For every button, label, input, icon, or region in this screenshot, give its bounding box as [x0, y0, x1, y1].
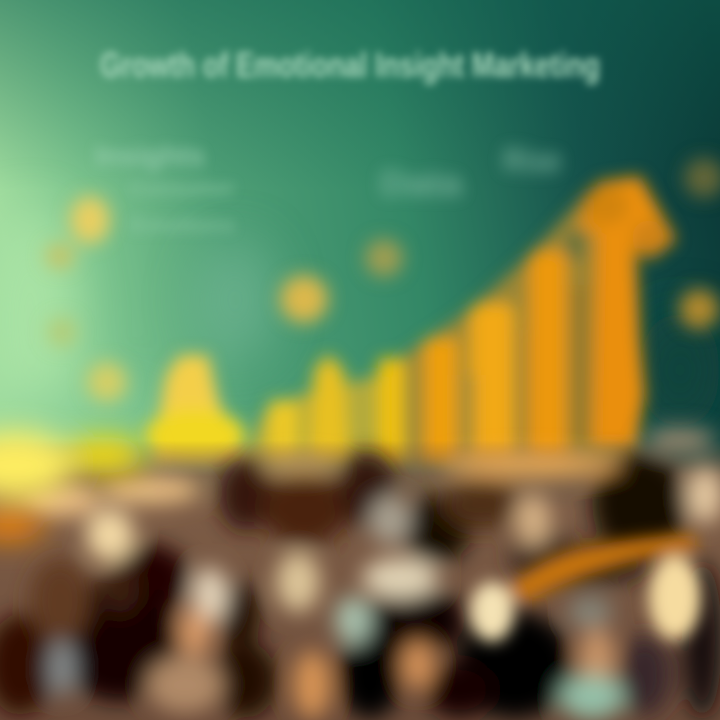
text block: right notes: Data	[380, 165, 463, 203]
background: darker band at top	[0, 0, 720, 190]
crowd: blurred ground and people shapes	[0, 428, 720, 719]
glow: yellow light at left	[0, 431, 145, 541]
text block: right notes: Rise	[503, 142, 561, 180]
text block: left notes: Consumer	[130, 178, 235, 200]
background glow	[0, 210, 720, 432]
dark figures	[0, 452, 720, 719]
coins: floating gold circles	[45, 158, 720, 402]
bar chart: rising yellow and orange bars with arrow	[145, 176, 676, 470]
text block: right notes	[380, 142, 561, 203]
highlights: bright foreground spots	[470, 536, 701, 642]
text block: left notes: Insights	[95, 140, 205, 171]
text block: left notes: Emotions	[130, 215, 235, 237]
text block: left notes	[95, 140, 235, 237]
light figures	[20, 428, 720, 719]
ground: crowd base solid	[0, 440, 720, 720]
